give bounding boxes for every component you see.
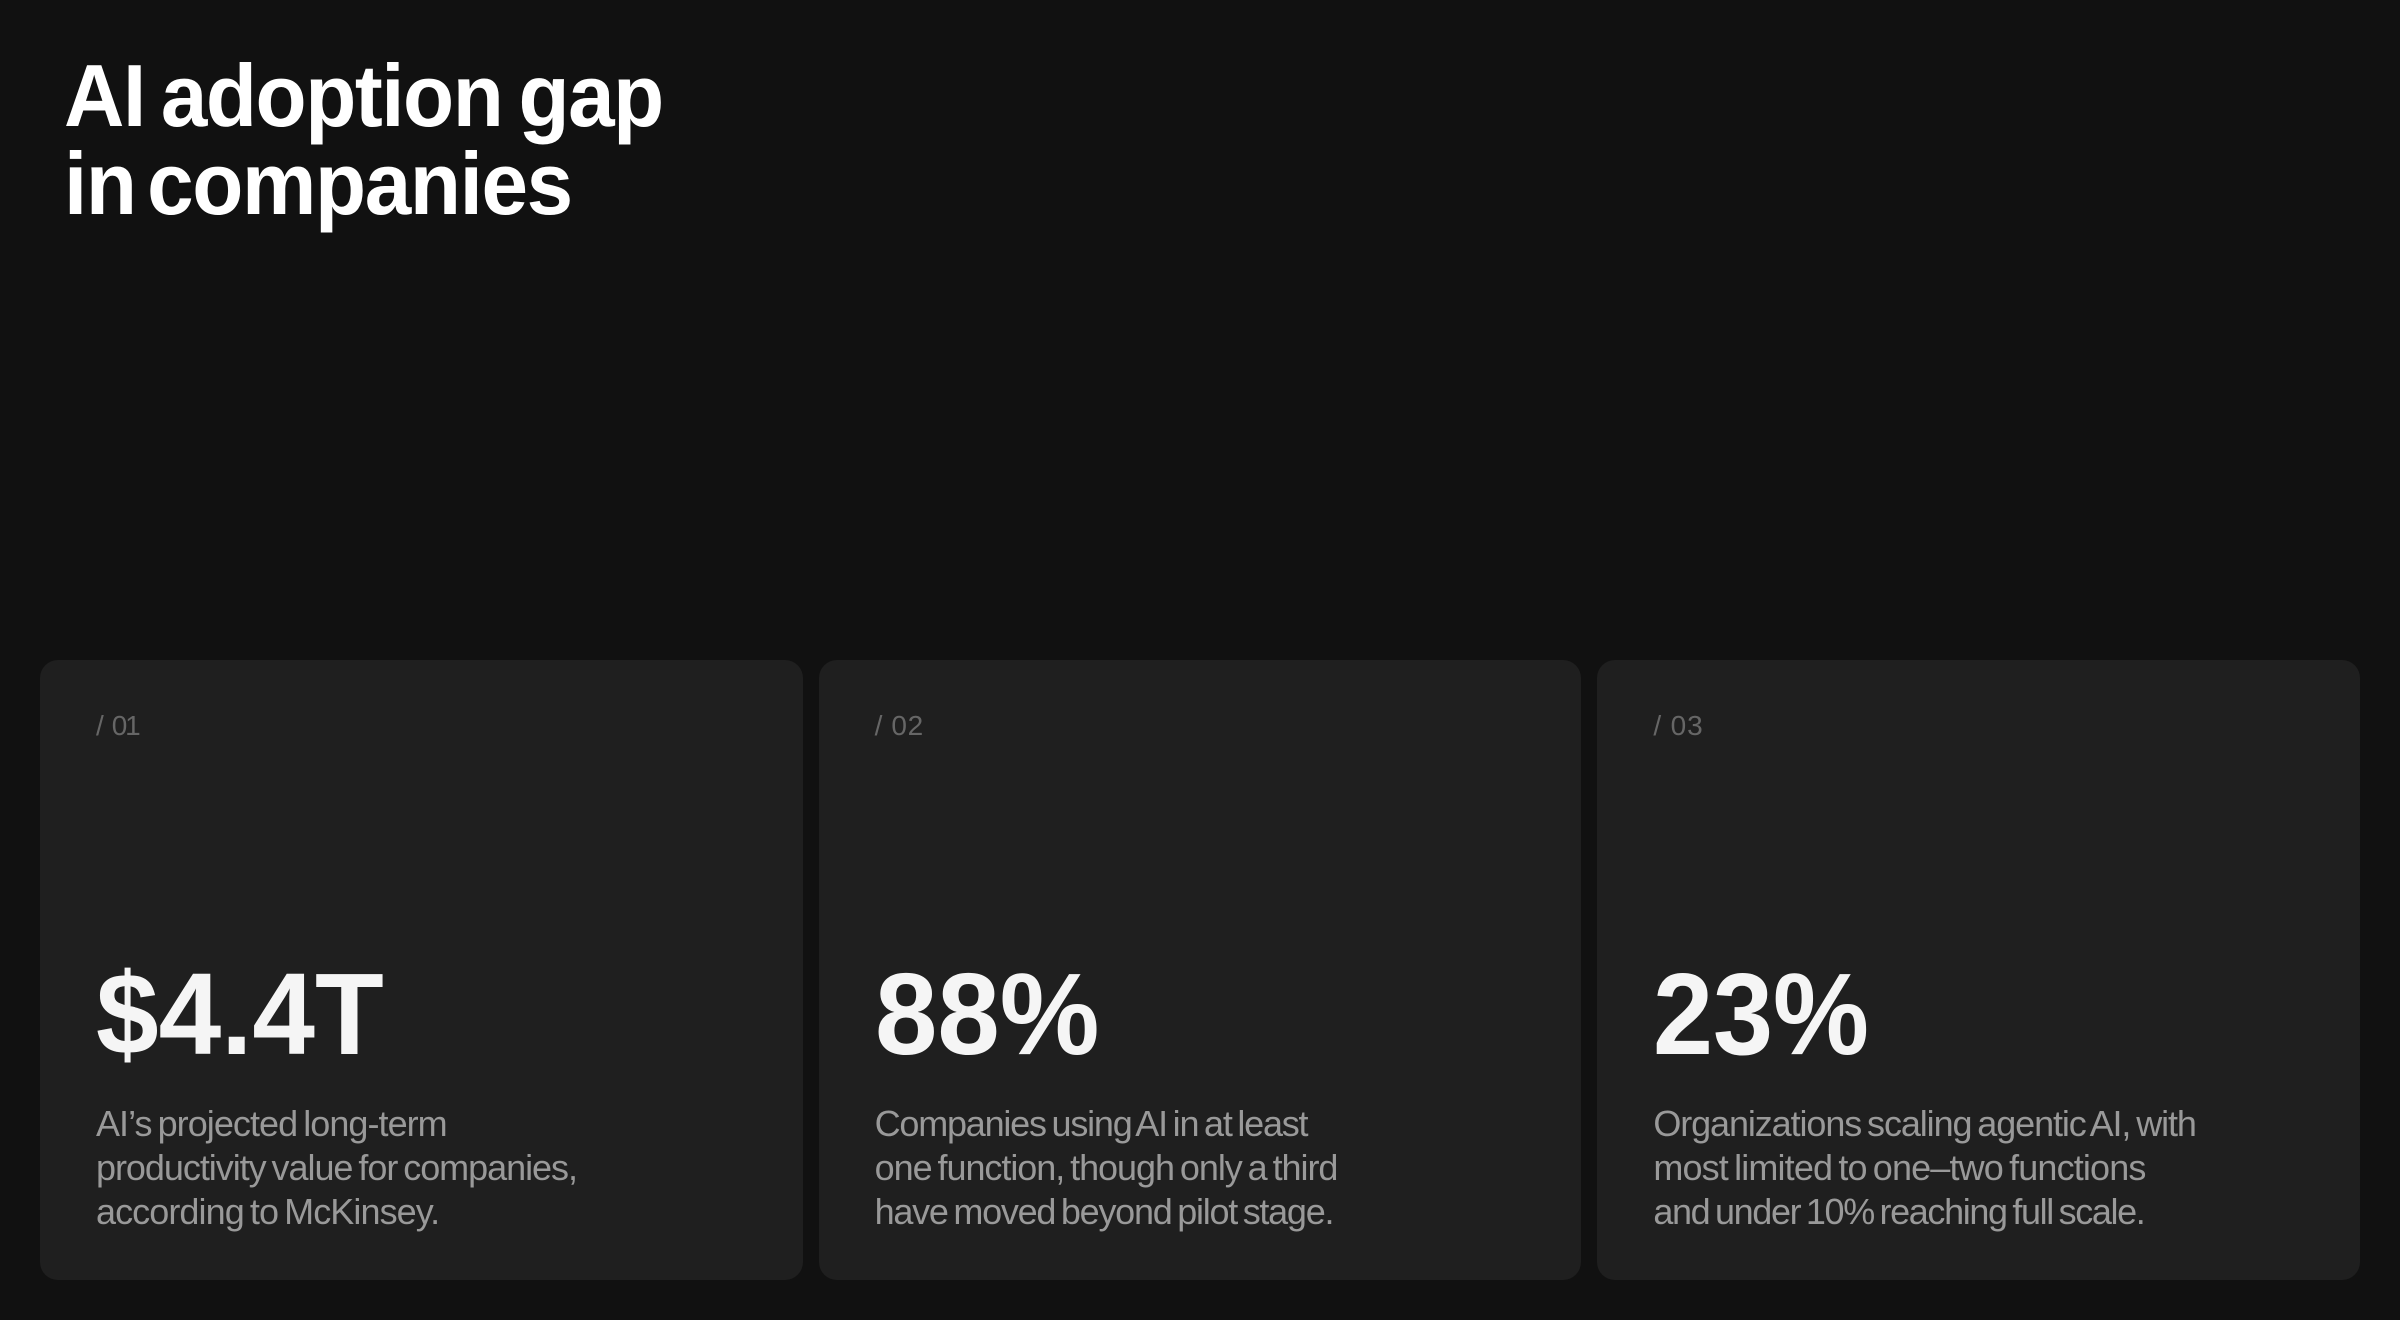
panel: stat 03 — [1597, 660, 2360, 1280]
stat value 23%: 23% — [1653, 949, 1869, 1079]
stat description 01: AI’s projected long-term — [96, 1102, 447, 1144]
stat description 03 — [1653, 1102, 2196, 1232]
stat description 01: productivity value for companies, — [96, 1146, 577, 1188]
stat description 01: according to McKinsey. — [96, 1190, 439, 1232]
panel: stat 02 — [819, 660, 1581, 1280]
card number 02: / 02 — [875, 710, 924, 741]
title: in companies — [64, 134, 572, 233]
stat value 88%: 88% — [875, 949, 1099, 1079]
card number 01: / 01 — [96, 710, 140, 741]
card number 03: / 03 — [1653, 710, 1704, 741]
stat description 03: and under 10% reaching full scale. — [1653, 1190, 2144, 1232]
stat description 02: one function, though only a third — [875, 1146, 1337, 1188]
panel: stat 01 — [40, 660, 803, 1280]
stat description 02 — [875, 1102, 1337, 1232]
stat description 03: Organizations scaling agentic AI, with — [1653, 1102, 2196, 1144]
stat value $4.4T: $4.4T — [96, 949, 384, 1079]
title — [64, 46, 663, 233]
stat description 02: Companies using AI in at least — [875, 1102, 1307, 1144]
stat description 03: most limited to one–two functions — [1653, 1146, 2146, 1188]
title: AI adoption gap — [64, 46, 663, 145]
stat description 02: have moved beyond pilot stage. — [875, 1190, 1333, 1232]
stat description 01 — [96, 1102, 577, 1232]
